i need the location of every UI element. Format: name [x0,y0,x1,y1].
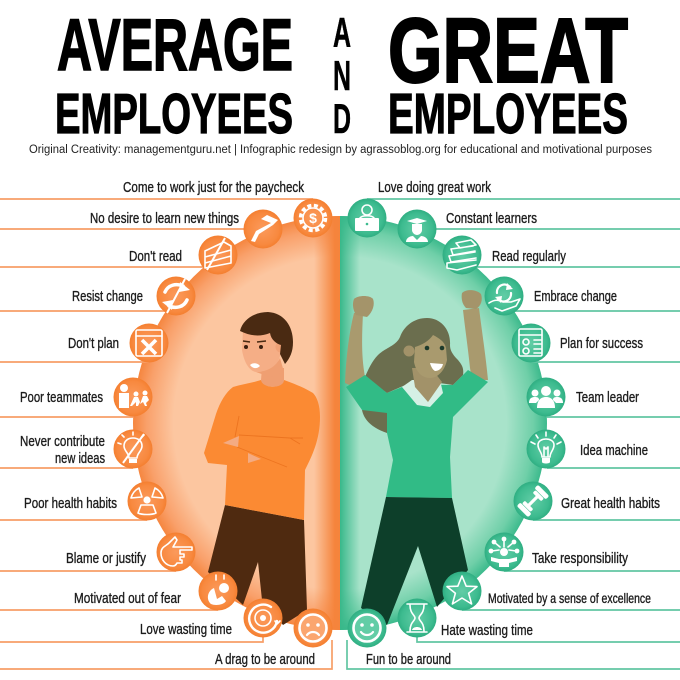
icon: graduate [398,210,436,248]
label: Idea machine [580,442,648,459]
back hair [365,318,463,393]
title: and: N [333,52,351,99]
label: Take responsibility [532,550,628,567]
label: Come to work just for the paycheck [123,179,304,196]
label: Love doing great work [378,179,491,196]
icon: crossed books [198,236,238,274]
neck [412,368,442,402]
panel: average employees [0,179,340,669]
icon: dumbbell [514,482,552,520]
icon: no desire to learn [244,210,282,248]
label: Team leader [576,389,639,406]
label: No desire to learn new things [90,210,239,227]
raised arms [345,313,365,390]
leader lines: great [347,199,680,669]
icon: radiation [128,482,166,520]
label: Resist change [72,288,143,305]
leader lines: average [0,199,332,669]
icon: paycheck gear [294,198,332,238]
eyes and brows [244,345,248,349]
hair [240,312,293,364]
icon: hourglass [398,598,436,638]
icon: sad face [294,608,332,648]
ear and face [404,346,414,356]
icon: planning checklist [512,324,550,362]
neck [261,368,284,387]
credit line: Original Creativity: managementguru.net | Infographic redesign by agrassoblog.org for educational and motivational purposes [29,144,652,156]
label: Plan for success [560,335,643,352]
icon: poor teammates [114,378,152,416]
label: Poor health habits [24,495,117,512]
label: Hate wasting time [441,622,533,639]
orange half circle background [133,210,340,635]
label: Don't plan [68,335,119,352]
title: average employees [55,5,293,146]
icon: take responsibility [484,532,524,572]
icon: resist change [156,276,196,316]
icon: crossed plan [130,324,168,362]
icon: paycheck gear: $ [309,210,317,226]
label: Never contribute [20,433,105,450]
icon: pointing hand [156,532,196,572]
icon: idea bulb [526,430,566,468]
figure: average employee [204,312,320,625]
icon: team leader [526,378,566,416]
label: Blame or justify [66,550,146,567]
label: Embrace change [534,288,617,305]
title: average employees: AVERAGE [57,5,293,86]
icon: star [442,572,482,610]
collar [402,380,443,407]
title: and: A [333,9,351,56]
eyes [425,346,429,350]
label: Motivated out of fear [74,590,181,607]
title: and [333,9,351,142]
hands [223,436,261,463]
fists [353,296,374,317]
title: and: D [333,95,351,142]
label: Don't read [129,248,182,265]
trousers [361,497,468,625]
icon: crossed light bulb [114,430,152,468]
panel: great employees [340,179,680,669]
label: new ideas [55,450,105,467]
label: Love wasting time [140,621,232,638]
title: great employees [388,0,628,146]
label: Constant learners [446,210,537,227]
green half circle background [340,210,547,635]
icon: curled figure [198,572,238,610]
label: Read regularly [492,248,566,265]
label: Poor teammates [20,389,103,406]
shirt [346,370,488,498]
sweater fold lines [235,416,303,467]
label: Fun to be around [366,651,451,668]
icon: stack of books [442,236,482,274]
mouth [250,363,260,368]
title: average employees: EMPLOYEES [55,82,293,146]
icon: smiling face [348,608,386,648]
sweater [204,380,320,520]
figure: great employee [345,290,488,625]
smile [430,363,443,371]
icon: working at laptop [348,198,386,238]
icon: hand with change arrows [484,276,524,316]
icon: target clock [244,598,282,638]
face [242,330,280,372]
trousers [208,505,307,625]
label: A drag to be around [215,651,315,668]
